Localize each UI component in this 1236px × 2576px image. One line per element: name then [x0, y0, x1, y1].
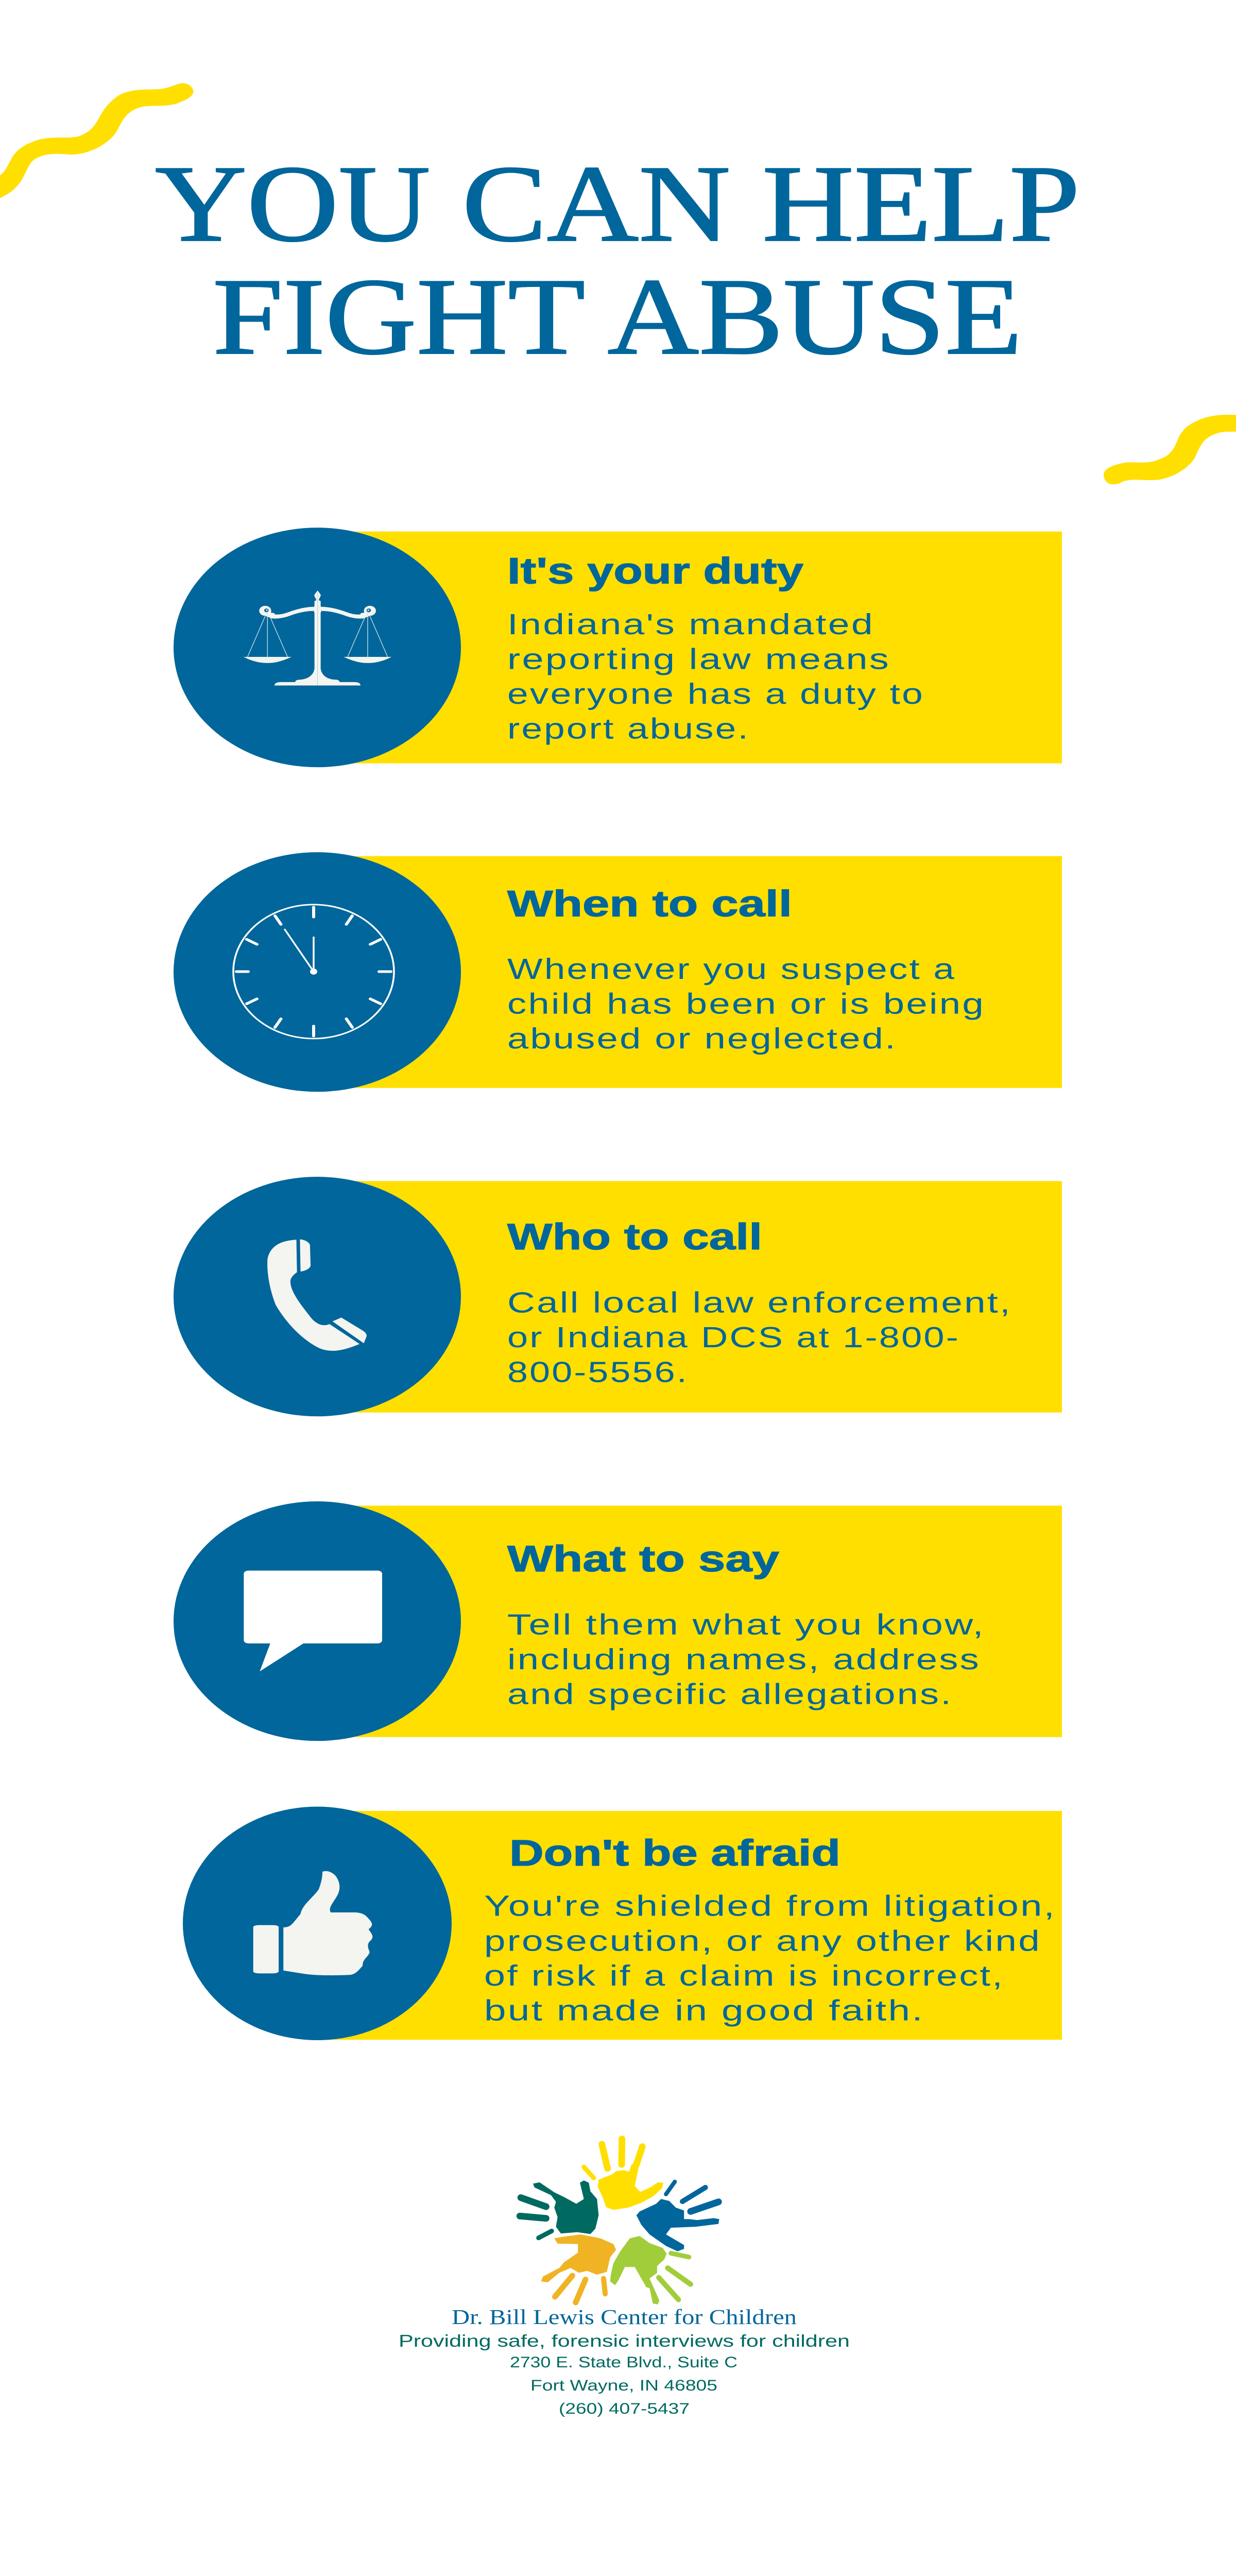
body text: and specific allegations. — [507, 1678, 953, 1710]
panel background — [317, 1505, 1062, 1737]
hand: green — [610, 2236, 691, 2304]
panel background — [317, 856, 1062, 1088]
heading: It's your duty — [507, 550, 803, 591]
body text: prosecution, or any other kind — [484, 1925, 1041, 1957]
icon badge — [174, 1177, 461, 1416]
heading: Don't be afraid — [509, 1832, 840, 1873]
hand: teal — [520, 2180, 598, 2238]
body text: Call local law enforcement, — [507, 1286, 1012, 1319]
body text — [507, 1286, 1012, 1388]
panel: when to call — [174, 852, 1062, 1092]
logo: five colored handprints — [520, 2139, 719, 2304]
body text: Whenever you suspect a — [507, 953, 956, 986]
contact details: 2730 E. State Blvd., Suite C — [510, 2354, 737, 2371]
contact details — [399, 2331, 850, 2417]
body text — [507, 608, 924, 745]
body text: You're shielded from litigation, — [484, 1890, 1056, 1922]
decoration: top-left yellow squiggle — [0, 83, 193, 198]
title: FIGHT ABUSE — [213, 256, 1022, 377]
icon: thumbs up — [253, 1871, 372, 1975]
title — [155, 143, 1080, 377]
body text: child has been or is being — [507, 988, 985, 1020]
body text — [484, 1890, 1056, 2027]
title: YOU CAN HELP — [155, 143, 1080, 264]
contact details: (260) 407-5437 — [559, 2400, 690, 2417]
icon: clock — [233, 905, 394, 1039]
icon badge — [174, 1501, 461, 1741]
hand: orange — [541, 2234, 616, 2302]
panel background — [317, 532, 1062, 764]
body text — [507, 953, 985, 1055]
body text: Indiana's mandated — [507, 608, 874, 641]
body text: including names, address — [507, 1643, 981, 1676]
contact details: Providing safe, forensic interviews for children — [399, 2331, 850, 2350]
body text: 800-5556. — [507, 1356, 689, 1388]
logo name: Dr. Bill Lewis Center for Children — [452, 2305, 797, 2329]
body text: or Indiana DCS at 1-800- — [507, 1321, 960, 1354]
heading: What to say — [507, 1538, 779, 1579]
icon: balance scales — [244, 590, 391, 686]
hand: blue — [637, 2182, 719, 2251]
icon: speech bubble — [244, 1570, 382, 1671]
panel: what to say — [174, 1501, 1062, 1741]
body text: everyone has a duty to — [507, 677, 924, 710]
icon badge — [183, 1807, 452, 2040]
body text: Tell them what you know, — [507, 1608, 985, 1641]
body text: reporting law means — [507, 643, 890, 675]
icon: telephone handset — [267, 1240, 367, 1351]
panel: who to call — [174, 1177, 1062, 1416]
body text: of risk if a claim is incorrect, — [484, 1959, 1004, 1992]
decoration: right yellow squiggle — [1104, 415, 1236, 484]
body text: but made in good faith. — [484, 1994, 924, 2027]
body text: report abuse. — [507, 713, 750, 745]
panel: don't be afraid — [183, 1807, 1062, 2040]
panel background — [317, 1811, 1062, 2040]
body text: abused or neglected. — [507, 1022, 897, 1055]
heading: Who to call — [507, 1216, 762, 1257]
panel background — [317, 1181, 1062, 1413]
hand: yellow — [584, 2139, 663, 2210]
heading: When to call — [507, 883, 792, 924]
icon badge — [174, 852, 461, 1092]
panel: it's your duty — [174, 528, 1062, 767]
icon badge — [174, 528, 461, 767]
contact details: Fort Wayne, IN 46805 — [530, 2377, 717, 2394]
body text — [507, 1608, 985, 1710]
